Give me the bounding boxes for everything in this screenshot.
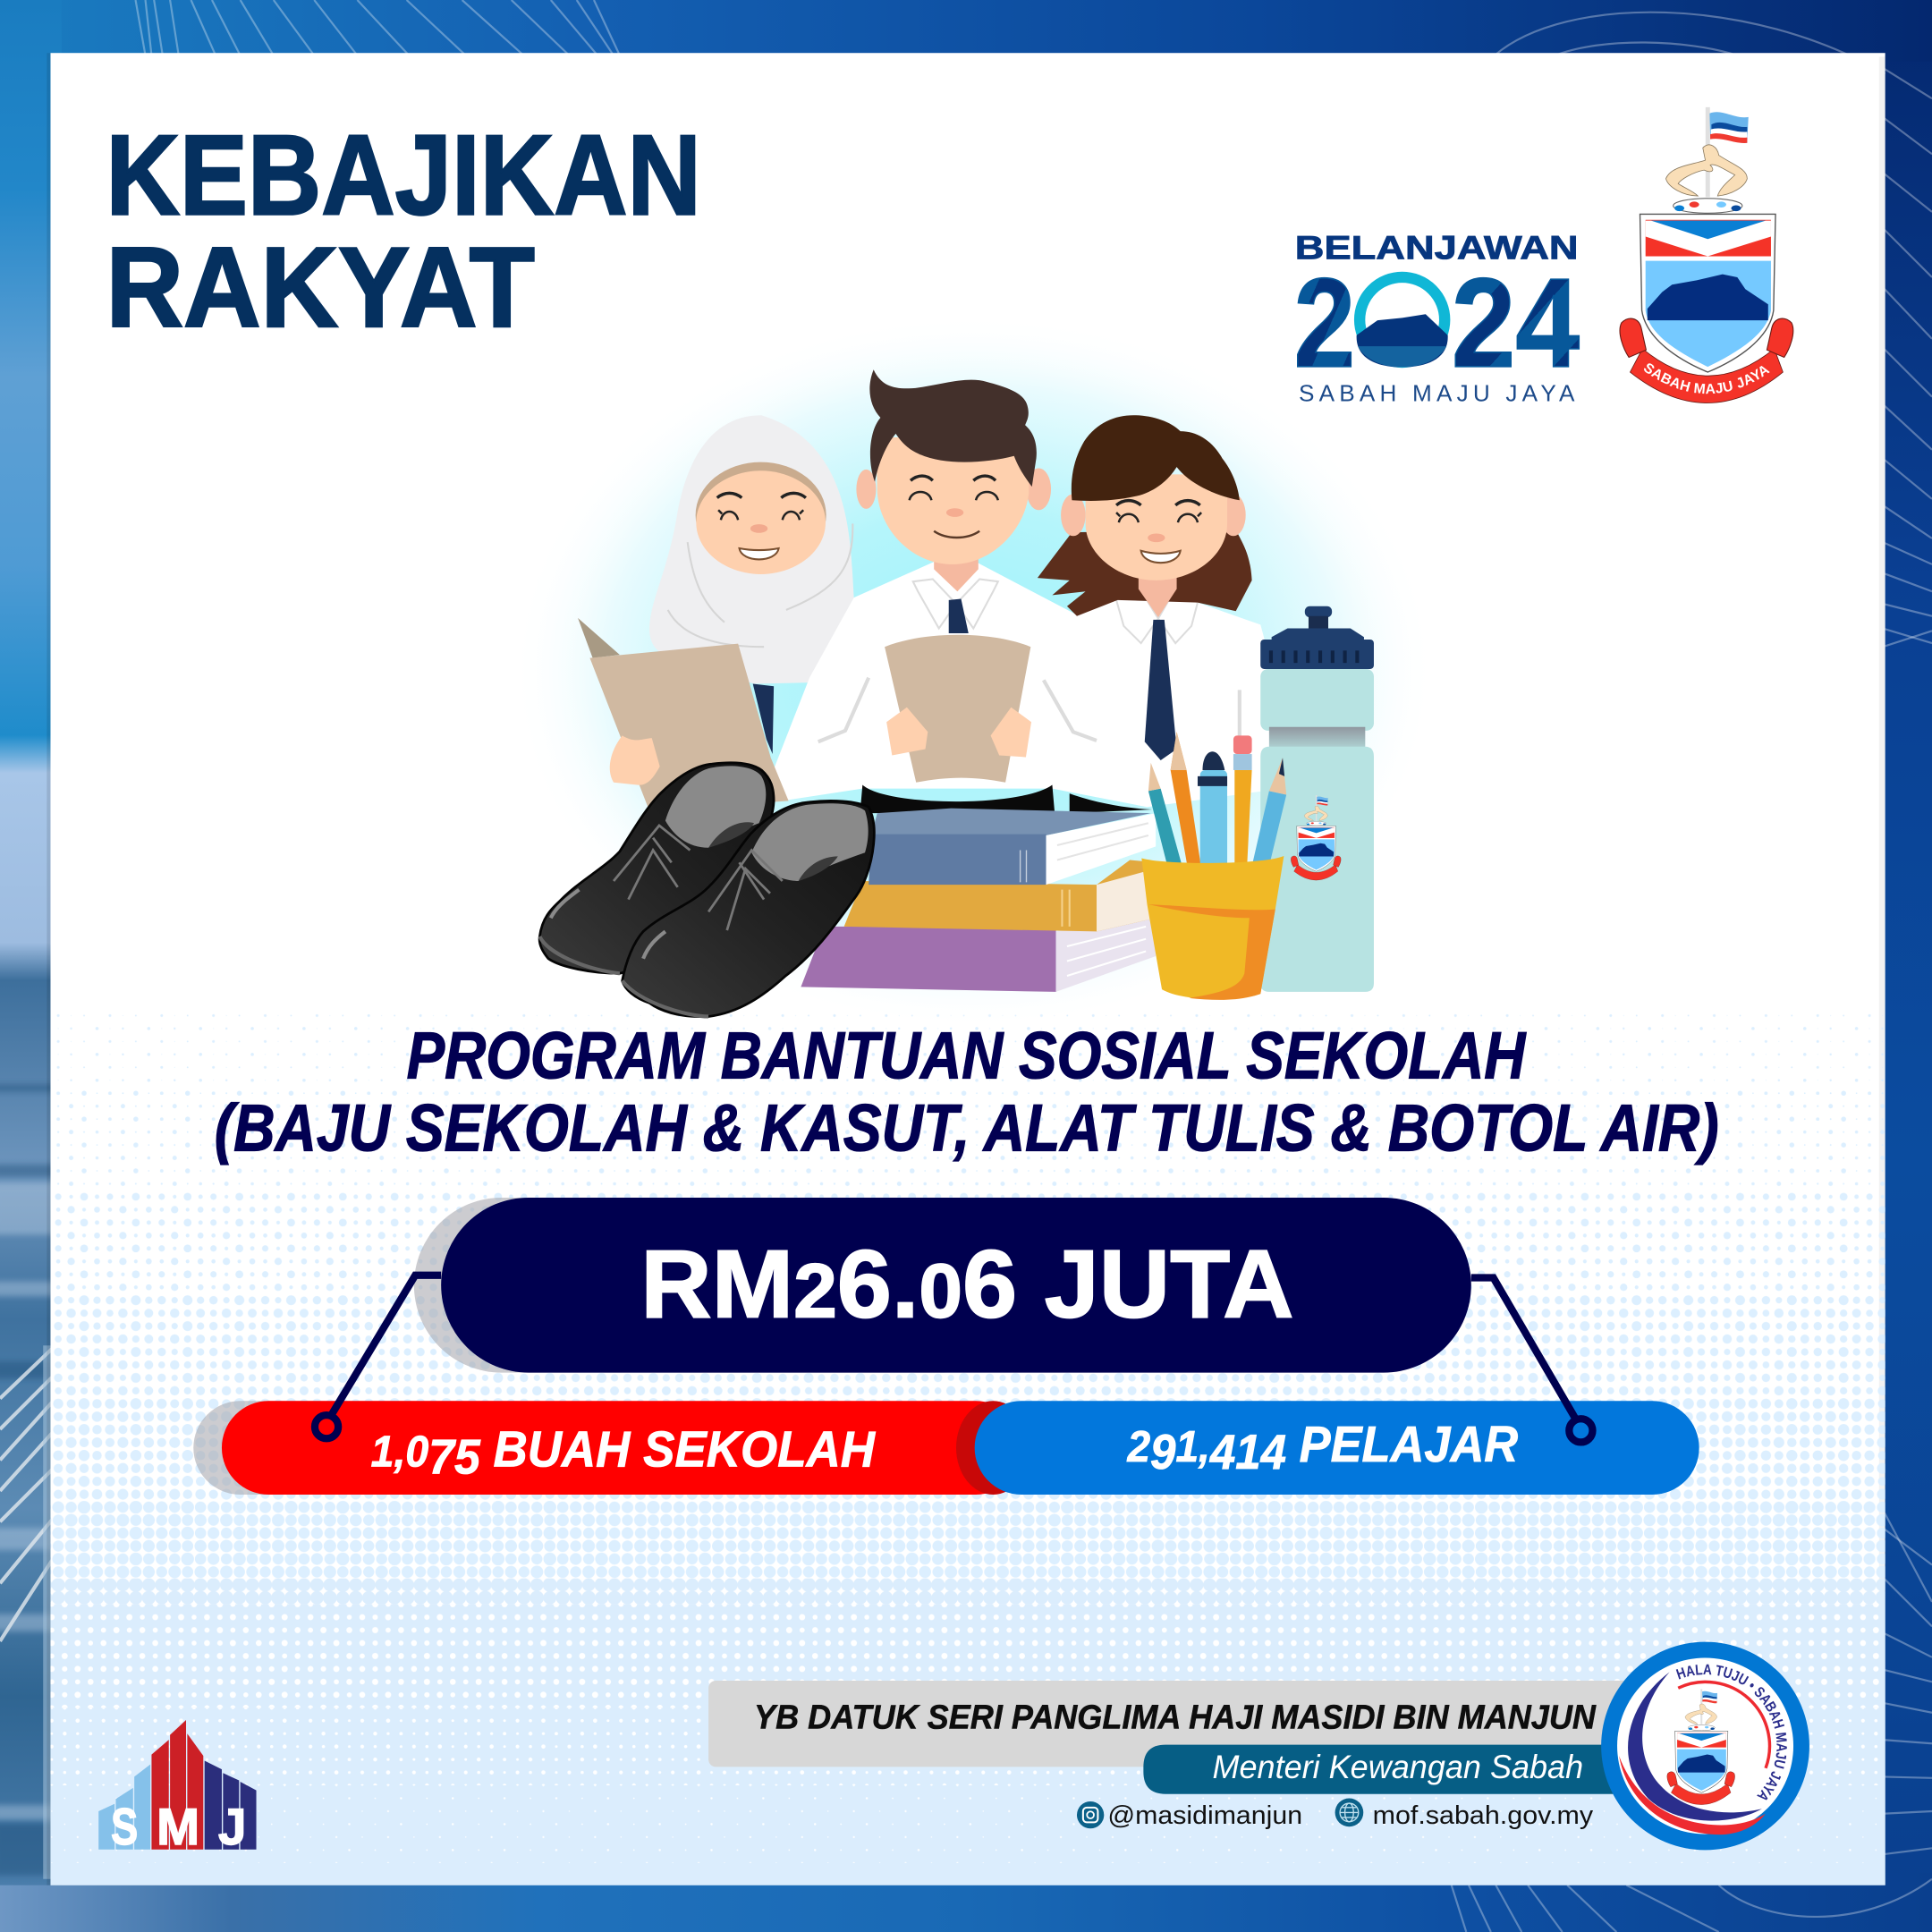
logo: SMJ: J (218, 1799, 247, 1856)
illustration: students and school supplies (512, 314, 1436, 1029)
callout: total amount (414, 1198, 1471, 1373)
title (106, 112, 701, 351)
social handle: @masidimanjun (1107, 1801, 1302, 1829)
logo: SMJ: M (157, 1799, 199, 1856)
logo: Hala Tuju Sabah Maju Jaya seal (1601, 1642, 1809, 1850)
callout: red bar schools and blue bar students: 2 (1127, 1421, 1150, 1471)
blue book (869, 809, 1156, 885)
school shoes (539, 763, 874, 1017)
callout: red bar schools and blue bar students: 1, (1175, 1421, 1210, 1471)
student: boy (856, 369, 1051, 591)
logo: SMJ (98, 1720, 257, 1856)
website: mof.sabah.gov.my (1373, 1801, 1594, 1829)
student: school shirts (753, 562, 1282, 813)
callout: red bar schools and blue bar students: 75 (428, 1429, 481, 1485)
purple book (801, 914, 1156, 992)
callout: red bar schools and blue bar students: 9 (1150, 1424, 1176, 1479)
logo: Belanjawan 2024: SABAH MAJU JAYA (1299, 379, 1575, 406)
callout: total amount: RM26.06 JUTA (640, 1231, 1293, 1338)
callout: red bar schools and blue bar students: PELAJAR (1286, 1416, 1518, 1472)
title: RAKYAT (106, 224, 535, 351)
reading papers (578, 618, 1031, 810)
student: girl (1038, 415, 1252, 617)
panel: minister name (708, 1681, 1632, 1767)
logo: Belanjawan 2024: 24 (1452, 253, 1580, 394)
yellow book (844, 860, 1156, 931)
logo: Sabah coat of arms (1619, 107, 1794, 403)
title: KEBAJIKAN (106, 112, 701, 239)
panel: minister role: Menteri Kewangan Sabah (1213, 1748, 1583, 1785)
water bottle (1260, 606, 1374, 992)
logo: Belanjawan 2024: BELANJAWAN (1295, 228, 1579, 266)
callout: red bar schools and blue bar students: 1,0 (371, 1426, 429, 1476)
callout: red bar schools and blue bar students: 414 (1209, 1424, 1286, 1479)
glow behind students (512, 314, 1436, 1029)
callout: red bar schools and blue bar students (193, 1401, 1699, 1495)
connector: right arrow line (1471, 1278, 1592, 1442)
pencil cup (1141, 856, 1284, 1000)
callout: red bar schools and blue bar students: BUAH SEKOLAH (480, 1420, 876, 1477)
student: hijab girl (649, 415, 854, 684)
panel: minister name: YB DATUK SERI PANGLIMA HAJI MASIDI BIN MANJUN (754, 1699, 1597, 1737)
heading: programme name (215, 1018, 1719, 1165)
heading: programme name: PROGRAM BANTUAN SOSIAL SEKOLAH (407, 1018, 1527, 1092)
panel: minister role (1143, 1745, 1639, 1794)
logo: SMJ: S (111, 1799, 138, 1856)
heading: programme name: (BAJU SEKOLAH & KASUT, ALAT TULIS & BOTOL AIR) (215, 1091, 1719, 1165)
connector: left arrow line (315, 1275, 441, 1438)
logo: Hala Tuju Sabah Maju Jaya seal: HALA TUJU • SABAH MAJU JAYA (1676, 1664, 1787, 1800)
logo: Belanjawan 2024: 2 (1293, 253, 1355, 394)
logo: Sabah coat of arms: SABAH MAJU JAYA (1644, 363, 1770, 394)
pens and pencils (1148, 732, 1286, 869)
logo: Belanjawan 2024 (1293, 228, 1580, 406)
